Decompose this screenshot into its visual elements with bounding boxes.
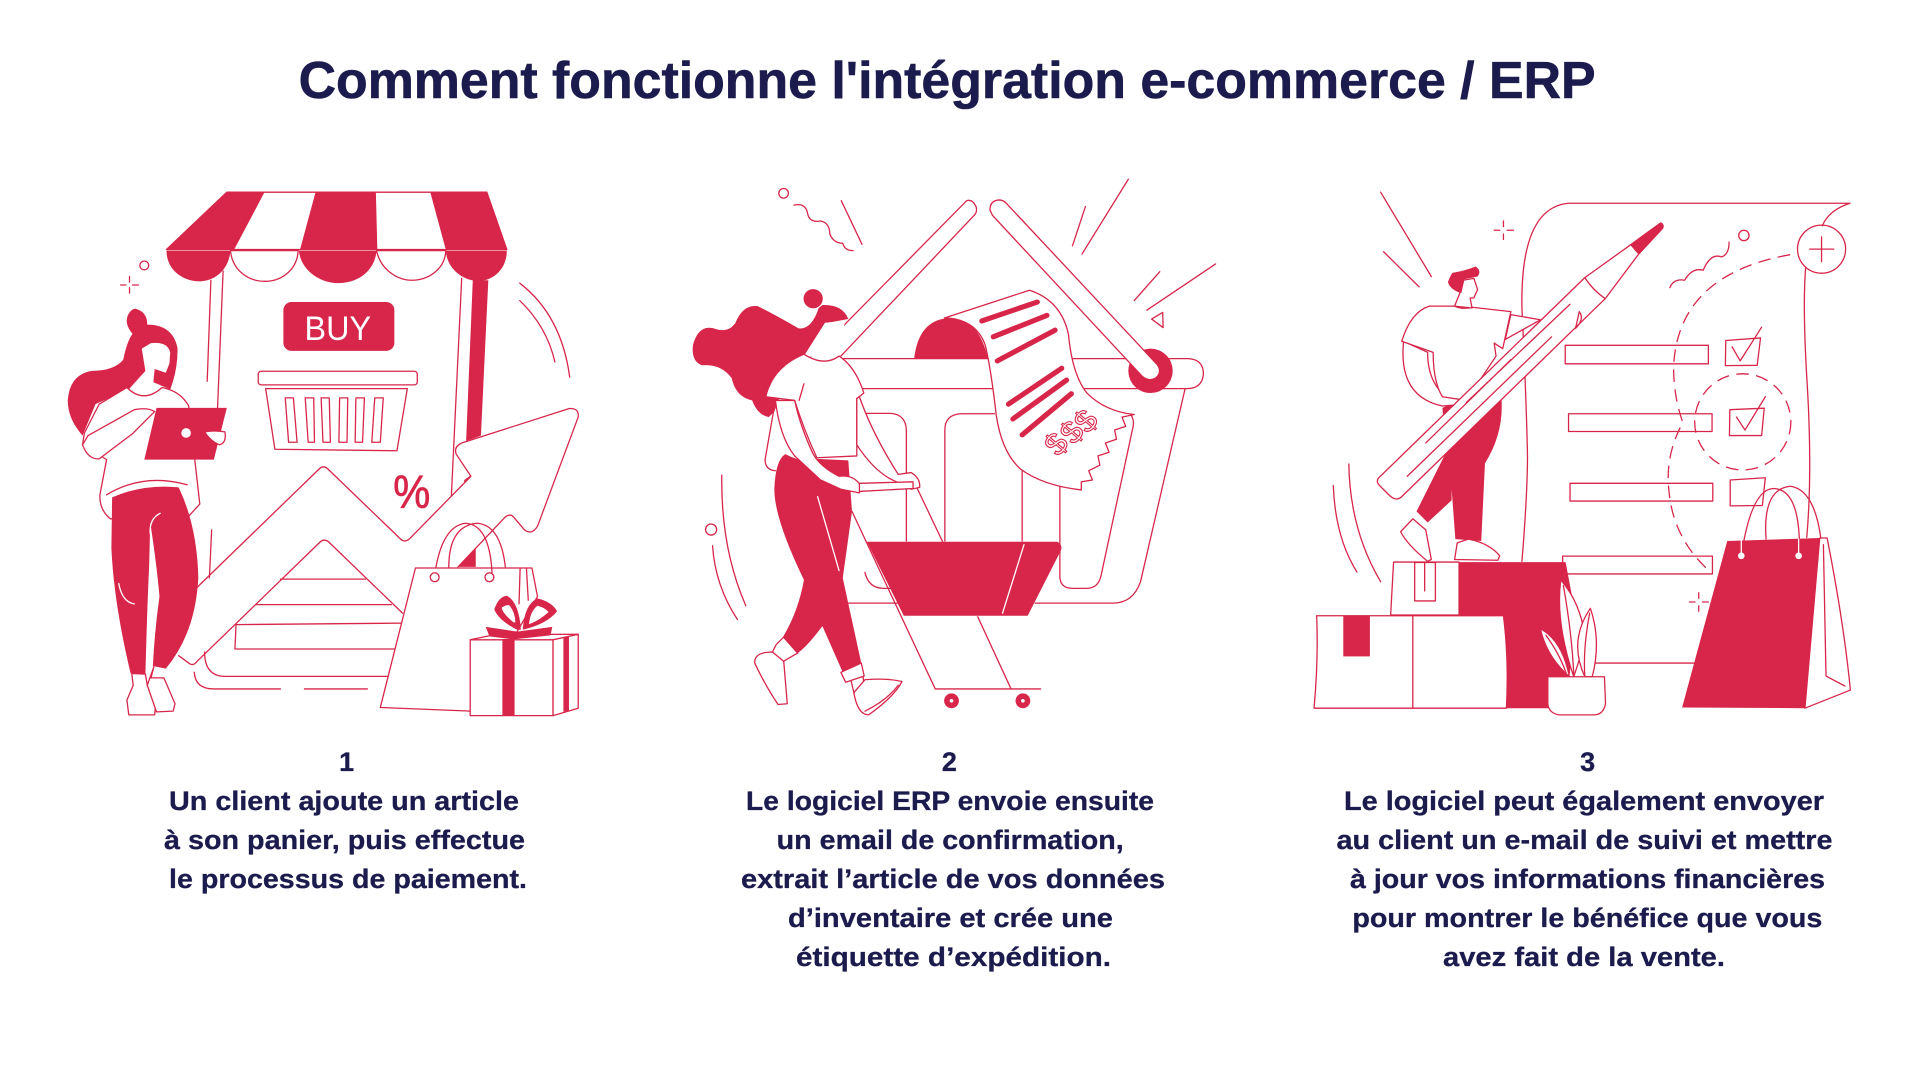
plant (1540, 580, 1606, 715)
woman pushing cart (693, 289, 920, 715)
decorative squiggles and rays (706, 179, 1216, 619)
boxes (1314, 562, 1576, 708)
step 2 text: Le logiciel ERP envoie ensuite (746, 786, 1154, 816)
illustration 3: checklist with pencil (1314, 192, 1850, 715)
basket (841, 200, 1203, 603)
step 1 text: le processus de paiement. (169, 864, 527, 894)
shopping bag (380, 523, 538, 711)
illustration 1: online store (68, 192, 578, 716)
growth arrow (179, 409, 578, 689)
step 1 text: Un client ajoute un article (169, 786, 519, 816)
shopping cart (852, 487, 1061, 708)
step 3 text: à jour vos informations financières (1350, 864, 1825, 894)
awning (167, 192, 507, 283)
step 3 text: Le logiciel peut également envoyer (1344, 786, 1825, 816)
dashed paths and decoration (1333, 192, 1791, 611)
icon: basket (258, 371, 417, 451)
document scroll (1522, 203, 1850, 663)
man with pencil (1401, 267, 1540, 561)
title: Comment fonctionne l'intégration e-commerce / ERP (299, 52, 1596, 110)
step 2 text: un email de confirmation, (777, 825, 1124, 855)
step 3 text (1336, 747, 1832, 972)
buy button (283, 302, 394, 351)
step 3 text: 3 (1580, 747, 1595, 777)
step 2 text: d’inventaire et crée une (788, 903, 1113, 933)
step 2 text (741, 747, 1165, 972)
receipt: $ (1037, 426, 1075, 462)
receipt: $ (1053, 414, 1091, 450)
receipt: $ (1067, 403, 1105, 439)
step 1 text (164, 747, 527, 894)
store phone frame (207, 271, 488, 578)
woman with tablet (68, 309, 227, 715)
percent sign: % (393, 466, 430, 518)
step 1 text: à son panier, puis effectue (164, 825, 525, 855)
step 2 text: 2 (942, 747, 957, 777)
receipt (944, 290, 1134, 490)
step 2 text: extrait l’article de vos données (741, 864, 1165, 894)
shopping bag (1682, 486, 1850, 708)
step 3 text: au client un e-mail de suivi et mettre (1336, 825, 1832, 855)
step 3 text: avez fait de la vente. (1443, 942, 1725, 972)
step 2 text: étiquette d’expédition. (796, 942, 1111, 972)
gift box (470, 596, 578, 716)
pencil (1377, 223, 1663, 499)
checklist rows (1563, 327, 1765, 574)
decorative sparkles and arcs (121, 261, 570, 377)
step 1 text: 1 (339, 747, 354, 777)
step 3 text: pour montrer le bénéfice que vous (1352, 903, 1822, 933)
buy button: BUY (304, 310, 371, 348)
illustration 2: basket and receipt (693, 179, 1216, 715)
